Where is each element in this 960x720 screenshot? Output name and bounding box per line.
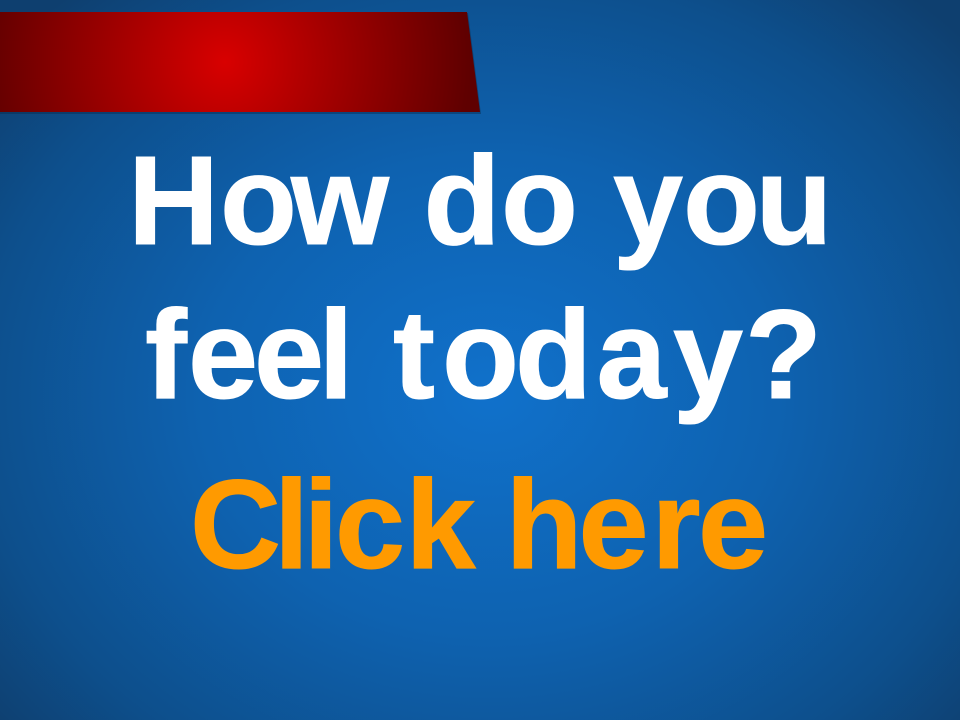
heading: how do you feel today: feel today? [145, 284, 822, 425]
heading: how do you feel today [128, 130, 832, 425]
call to action: click here: Click here [190, 454, 768, 595]
heading: how do you feel today: How do you [128, 130, 832, 271]
red banner [0, 12, 481, 114]
